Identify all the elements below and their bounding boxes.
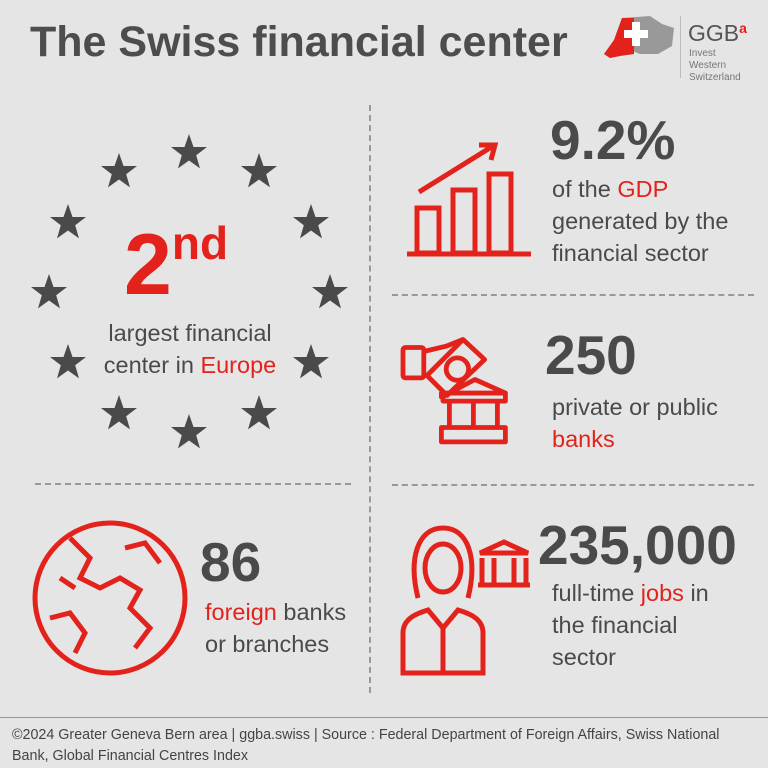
icon globe (32, 520, 188, 676)
title: The Swiss financial center (30, 18, 568, 66)
text: the financial (552, 612, 677, 638)
text europe (104, 320, 276, 378)
icon bank hand (400, 337, 508, 444)
235,000: 235,000 (538, 514, 737, 576)
stars ring (31, 134, 348, 448)
text europe: largest financial (108, 320, 272, 346)
text europe: center in Europe (104, 352, 276, 378)
text: or branches (205, 631, 329, 657)
250: 250 (545, 324, 637, 386)
divider vertical (369, 105, 371, 693)
text: sector (552, 644, 616, 670)
text: banks (552, 426, 615, 452)
86: 86 (200, 531, 261, 593)
text: of the GDP (552, 176, 668, 202)
logo: Western (689, 60, 726, 71)
footer (0, 717, 768, 718)
icon chart (407, 142, 531, 256)
logo: Invest (689, 48, 716, 59)
icon woman (400, 526, 530, 676)
text: generated by the (552, 208, 728, 234)
text: private or public (552, 394, 718, 420)
logo (604, 16, 747, 83)
logo: Switzerland (689, 72, 741, 83)
text: foreign banks (205, 599, 346, 625)
logo: GGBa (688, 20, 747, 46)
2nd: 2nd (124, 217, 228, 313)
text: financial sector (552, 240, 709, 266)
text: Bank, Global Financial Centres Index (12, 748, 248, 764)
9.2%: 9.2% (550, 109, 675, 171)
text: ©2024 Greater Geneva Bern area | ggba.swiss | Source : Federal Department of Foreign Affairs, Swiss National (12, 727, 719, 743)
text: full-time jobs in (552, 580, 709, 606)
